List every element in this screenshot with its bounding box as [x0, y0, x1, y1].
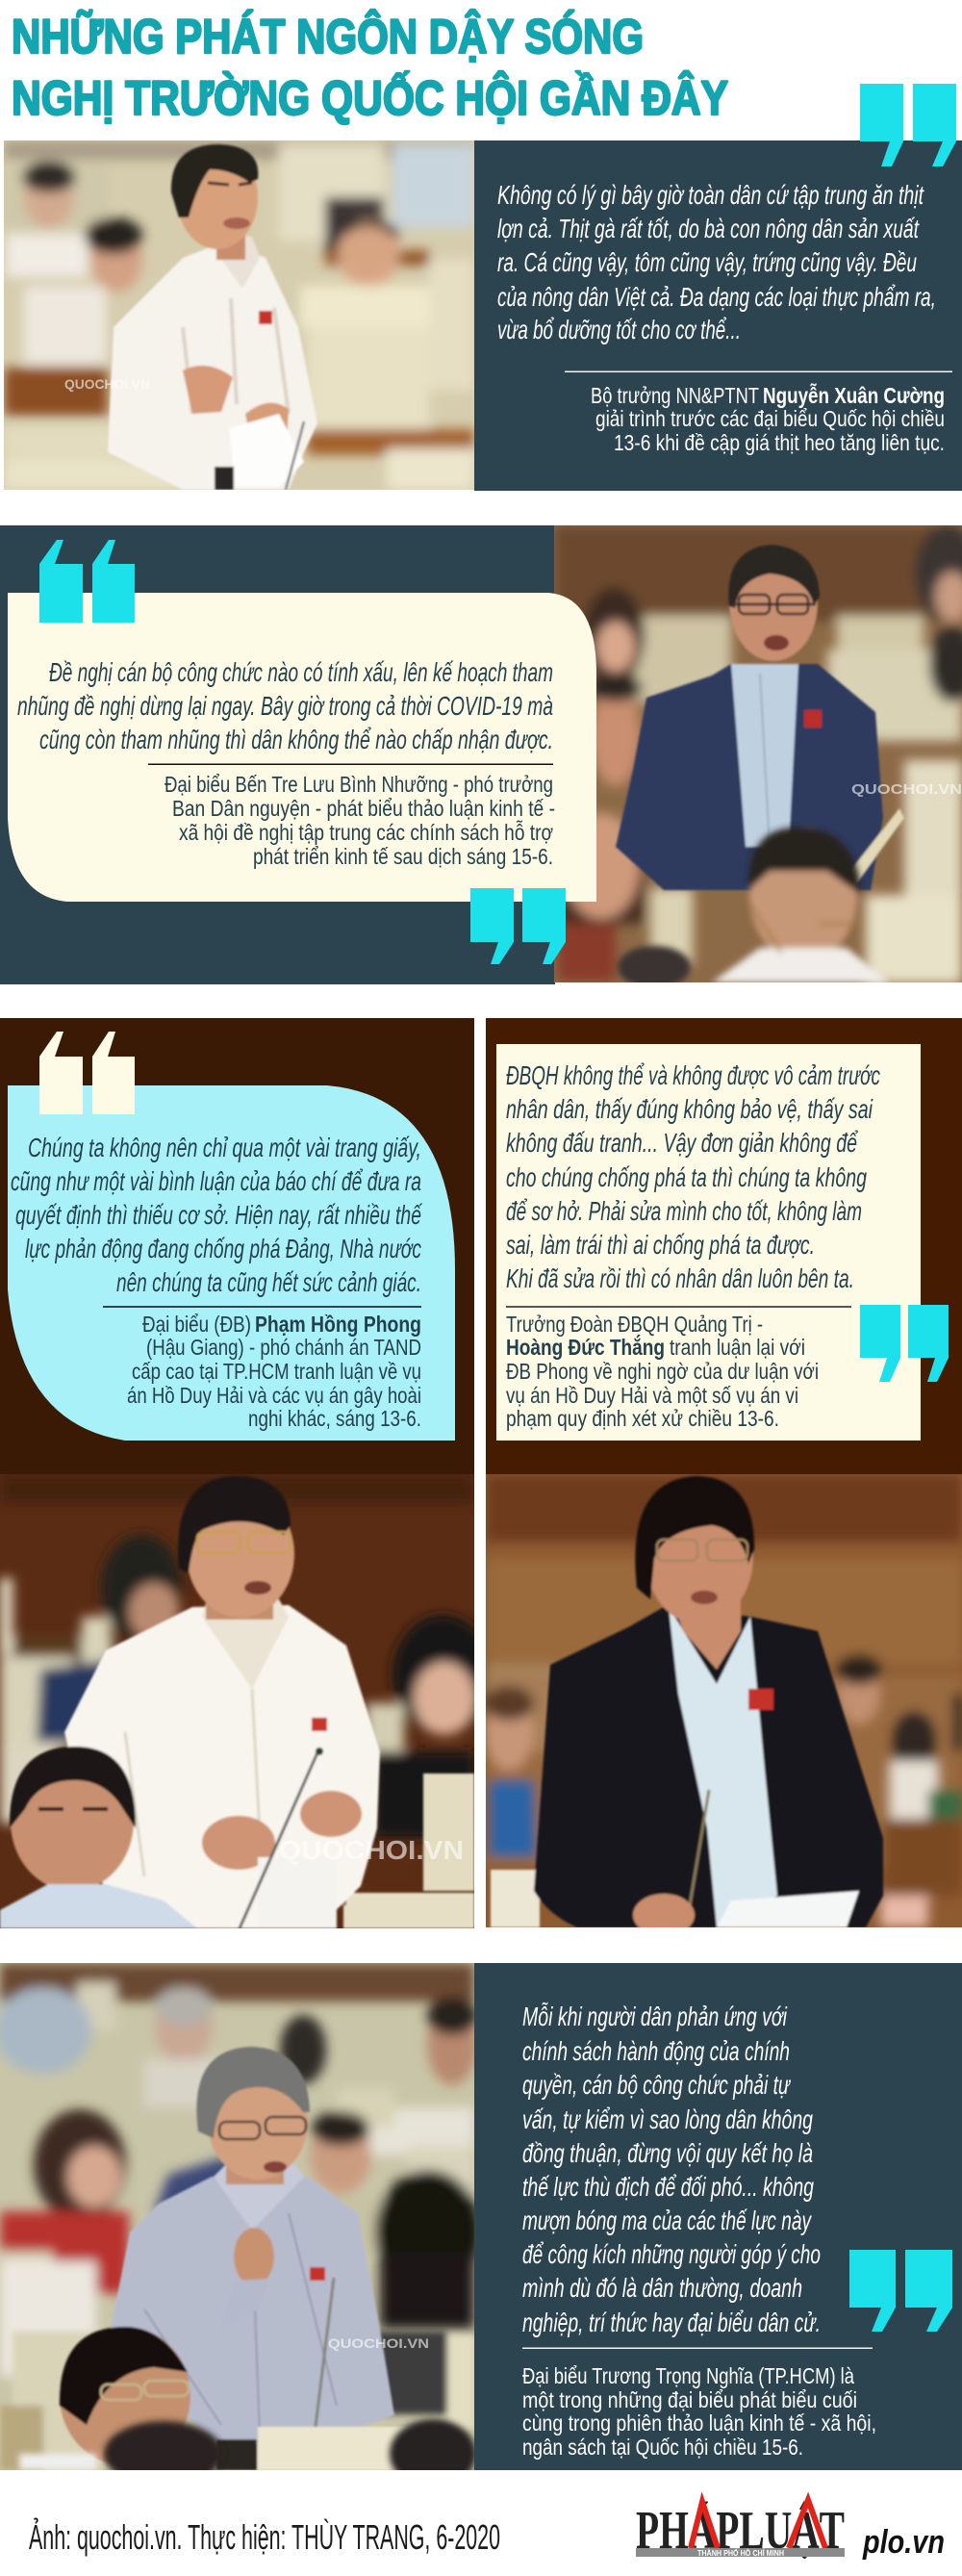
- logo tagline: THÀNH PHỐ HỒ CHÍ MINH: [697, 2548, 784, 2558]
- attribution: nghi khác, sáng 13-6.: [248, 1406, 421, 1431]
- attribution: [165, 772, 555, 869]
- title: NGHỊ TRƯỜNG QUỐC HỘI GẦN ĐÂY: [12, 70, 728, 125]
- photo: Nguyễn Xuân Cường speaking: [4, 140, 474, 490]
- quote text: [17, 657, 553, 754]
- quote text: để công kích những người góp ý cho: [522, 2239, 821, 2269]
- section 3: Phạm Hồng Phong: [0, 1018, 493, 1928]
- title: NHỮNG PHÁT NGÔN DẬY SÓNG: [12, 9, 644, 64]
- logo wordmark: PHÁPLUẬT: [636, 2500, 845, 2561]
- quote text: Đề nghị cán bộ công chức nào có tính xấu, lên kế hoạch tham: [49, 657, 553, 687]
- attribution: [522, 2363, 876, 2460]
- attribution: [591, 382, 945, 455]
- red peak letters: [691, 2500, 825, 2548]
- icon: opening quote mark: [39, 1032, 135, 1114]
- icon: closing quote mark: [849, 2250, 952, 2332]
- quote text: đồng thuận, đừng vội quy kết họ là: [522, 2138, 813, 2168]
- attribution: [127, 1312, 421, 1431]
- quote text: vấn, tự kiểm vì sao lòng dân không: [522, 2104, 813, 2134]
- title: [12, 9, 728, 125]
- attribution: tranh luận lại với: [670, 1335, 805, 1360]
- icon: closing quote mark: [860, 84, 956, 166]
- quote text: Mỗi khi người dân phản ứng với: [522, 2002, 788, 2031]
- panel: blue quote card: [8, 1085, 455, 1441]
- footer credit: Ảnh: quochoi.vn. Thực hiện: THÙY TRANG, 6-2020: [29, 2517, 500, 2557]
- photo: Lưu Bình Nhưỡng speaking: [554, 524, 962, 988]
- quote text: sai, làm trái thì ai chống phá ta được.: [506, 1230, 815, 1260]
- panel: brown background: [486, 1018, 962, 1476]
- quote text: cũng như một vài bình luận của báo chí để đưa ra: [11, 1166, 421, 1196]
- attribution: Bộ trưởng NN&PTNT: [591, 383, 759, 408]
- quote text: vừa bổ dưỡng tốt cho cơ thể...: [497, 315, 741, 344]
- quote text: Chúng ta không nên chỉ qua một vài trang giấy,: [28, 1133, 421, 1162]
- quote text: cũng còn tham nhũng thì dân không thể nào chấp nhận được.: [39, 725, 553, 754]
- quote text: mượn bóng ma của các thế lực này: [522, 2206, 812, 2235]
- attribution: án Hồ Duy Hải và các vụ án gây hoài: [127, 1383, 421, 1408]
- section 5: Trương Trọng Nghĩa: [0, 1963, 962, 2488]
- quote text: [497, 180, 936, 344]
- attribution: (Hậu Giang) - phó chánh án TAND: [146, 1335, 421, 1360]
- attribution: Đại biểu (ĐB): [142, 1312, 251, 1337]
- attribution: Đại biểu Bến Tre Lưu Bình Nhưỡng - phó trưởng: [165, 772, 553, 797]
- section 2: Lưu Bình Nhưỡng: [0, 524, 962, 988]
- panel: dark background: [0, 525, 555, 984]
- watermark: QUOCHOI.VN: [64, 376, 150, 392]
- attribution: phát triển kinh tế sau dịch sáng 15-6.: [253, 844, 553, 869]
- icon: closing quote mark: [860, 1305, 949, 1382]
- watermark: QUOCHOI.VN: [851, 781, 962, 798]
- quote text: mình dù đó là dân thường, doanh: [522, 2273, 802, 2303]
- quote text: [506, 1060, 880, 1293]
- quote text: quyết định thì thiếu cơ sở. Hiện nay, rất nhiều thế: [15, 1200, 423, 1230]
- logo: Pháp Luật: [636, 2500, 845, 2561]
- quote text: nghiệp, trí thức hay đại biểu dân cử.: [522, 2308, 821, 2337]
- attribution: ĐB Phong về nghi ngờ của dư luận với: [506, 1359, 819, 1384]
- attribution: một trong những đại biểu phát biểu cuối: [522, 2387, 857, 2412]
- attribution: ngân sách tại Quốc hội chiều 15-6.: [522, 2435, 803, 2460]
- quote text: quyền, cán bộ công chức phải tự: [522, 2070, 792, 2100]
- attribution: cấp cao tại TP.HCM tranh luận về vụ: [132, 1359, 421, 1384]
- attribution: vụ án Hồ Duy Hải và một số vụ án vi: [506, 1383, 798, 1408]
- attribution: xã hội đề nghị tập trung các chính sách hỗ trợ: [179, 820, 553, 845]
- photo: Trương Trọng Nghĩa speaking: [0, 1963, 481, 2488]
- attribution: phạm quy định xét xử chiều 13-6.: [506, 1406, 779, 1431]
- attribution: cùng trong phiên thảo luận kinh tế - xã hội,: [522, 2410, 876, 2436]
- panel: cream quote card: [8, 593, 596, 902]
- attribution: Hoàng Đức Thắng: [506, 1334, 665, 1360]
- photo: Phạm Hồng Phong speaking: [0, 1474, 493, 1928]
- section 4: Hoàng Đức Thắng: [484, 1018, 962, 1936]
- panel: dark quote background: [474, 1963, 962, 2470]
- watermark: QUOCHOI.VN: [279, 1835, 464, 1865]
- attribution: Đại biểu Trương Trọng Nghĩa (TP.HCM) là: [522, 2363, 855, 2388]
- icon: opening quote mark: [39, 540, 135, 623]
- quote text: [11, 1133, 423, 1297]
- site name: plo.vn: [862, 2524, 945, 2561]
- watermark: QUOCHOI.VN: [328, 2335, 429, 2351]
- quote text: lực phản động đang chống phá Đảng, Nhà nước: [25, 1234, 421, 1263]
- quote text: chính sách hành động của chính: [522, 2036, 790, 2066]
- section 1: Nguyễn Xuân Cường: [4, 84, 962, 491]
- panel: dark brown background: [0, 1018, 474, 1476]
- quote text: nên chúng ta cũng hết sức cảnh giác.: [116, 1267, 421, 1297]
- attribution: Trưởng Đoàn ĐBQH Quảng Trị -: [506, 1312, 763, 1337]
- photo: Hoàng Đức Thắng speaking: [484, 1474, 962, 1936]
- quote text: nhũng đề nghị dừng lại ngay. Bây giờ trong cả thời COVID-19 mà: [17, 691, 553, 721]
- attribution: [506, 1312, 819, 1431]
- quote text: thế lực thù địch để đối phó... không: [522, 2172, 814, 2202]
- attribution: Ban Dân nguyện - phát biểu thảo luận kinh tế -: [172, 796, 555, 821]
- logo band: [636, 2548, 845, 2557]
- panel: dark quote background: [474, 140, 962, 491]
- panel: cream quote card: [496, 1044, 921, 1441]
- attribution: Phạm Hồng Phong: [255, 1312, 421, 1337]
- icon: closing quote mark: [470, 888, 566, 964]
- quote text: [522, 2002, 821, 2337]
